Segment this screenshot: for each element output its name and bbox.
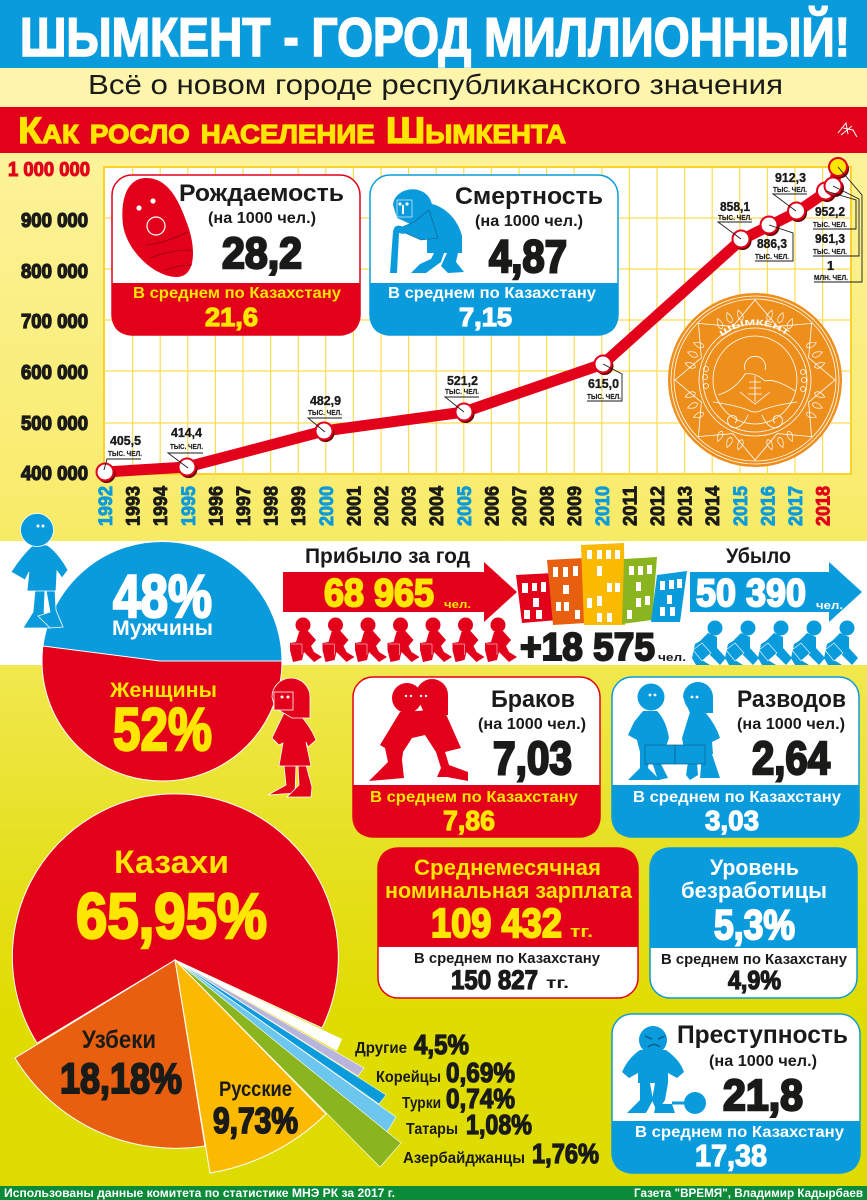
panel: crime rate xyxy=(612,1014,860,1173)
data callouts: 961,3 xyxy=(815,231,845,246)
x axis year labels: 1996 xyxy=(206,486,227,526)
panel: death rate: Смертность xyxy=(455,183,603,210)
legend: small ethnic groups: 1,08% xyxy=(466,1109,532,1140)
icon: colorful city buildings xyxy=(516,543,687,625)
x axis year labels: 2018 xyxy=(814,486,835,526)
section heading: population growth xyxy=(0,107,867,153)
panel: crime rate: 21,8 xyxy=(723,1071,803,1120)
panel: arrivals xyxy=(283,545,517,662)
data callouts: ТЫС. ЧЕЛ. xyxy=(813,220,847,229)
panel: marriages: 7,03 xyxy=(493,732,572,784)
icons: departing people xyxy=(692,620,858,665)
panel: death rate: В среднем по Казахстану xyxy=(388,285,596,302)
data callouts: 858,1 xyxy=(720,199,750,214)
chart: gender pie: Женщины xyxy=(109,679,217,702)
x axis year labels: 2015 xyxy=(731,486,752,526)
panel: average salary: 150 827 xyxy=(451,965,538,995)
footer: Использованы данные комитета по статистике МНЭ РК за 2017 г. xyxy=(4,1188,395,1200)
x axis year labels: 2001 xyxy=(344,486,365,526)
slice: Koreans xyxy=(175,960,364,1076)
panel: arrivals: Прибыло за год xyxy=(305,545,470,568)
icon: woman xyxy=(268,678,316,797)
x axis year labels: 2013 xyxy=(676,486,697,526)
panel: marriages: 7,86 xyxy=(443,805,495,836)
x axis year labels: 2008 xyxy=(538,486,559,526)
chart: ethnic composition pie xyxy=(12,794,401,1173)
panel: unemployment: 5,3% xyxy=(714,901,795,948)
panel: birth rate: 21,6 xyxy=(205,302,258,332)
panel: departures: 50 390 xyxy=(696,572,806,615)
x axis year labels: 2004 xyxy=(427,486,448,526)
panel: arrivals: 68 965 xyxy=(324,572,434,615)
population line xyxy=(105,168,838,472)
chart: ethnic composition pie: Казахи xyxy=(114,844,229,880)
legend: small ethnic groups: Турки xyxy=(402,1095,441,1112)
y axis labels: 600 000 xyxy=(21,362,88,384)
footer xyxy=(0,1186,867,1200)
plot grid xyxy=(104,167,851,474)
chart: gender pie xyxy=(42,541,282,781)
panel: average salary: Среднемесячная xyxy=(414,855,601,880)
panel: divorces: 2,64 xyxy=(752,732,830,784)
chart: population line xyxy=(8,157,862,526)
x axis year labels: 1998 xyxy=(262,486,283,526)
legend: small ethnic groups: 0,69% xyxy=(446,1057,515,1088)
x axis year labels: 2014 xyxy=(703,486,724,526)
data callouts: 912,3 xyxy=(775,170,806,185)
data callouts: ТЫС. ЧЕЛ. xyxy=(108,449,142,458)
slice: Uzbeks xyxy=(15,960,205,1148)
panel: marriages: В среднем по Казахстану xyxy=(370,789,578,806)
x axis year labels: 1992 xyxy=(96,486,117,526)
panel: birth rate: В среднем по Казахстану xyxy=(133,285,341,302)
y axis labels: 800 000 xyxy=(21,261,88,283)
slice: Azerbaijanis xyxy=(175,960,401,1167)
panel: death rate: 7,15 xyxy=(459,302,512,332)
panel: crime rate: 17,38 xyxy=(695,1138,767,1173)
x axis year labels: 2002 xyxy=(372,486,393,526)
chart: ethnic composition pie: Русские xyxy=(219,1078,292,1101)
net migration figure: чел. xyxy=(658,652,686,664)
data callouts: 482,9 xyxy=(310,393,341,408)
x axis year labels: 2010 xyxy=(593,486,614,526)
data callouts: 1 xyxy=(827,258,834,273)
panel: death rate xyxy=(370,175,618,335)
slice: Tatars xyxy=(175,960,396,1132)
net migration figure: +18 575 xyxy=(520,626,655,669)
x axis year labels: 1995 xyxy=(179,486,200,526)
icon: city emblem: ШЫМКЕНТ xyxy=(719,319,790,336)
data callouts: 521,2 xyxy=(447,373,478,388)
data callouts: 405,5 xyxy=(110,433,141,448)
y axis labels: 700 000 xyxy=(21,311,88,333)
panel: crime rate: Преступность xyxy=(677,1021,848,1049)
icon: artist signature xyxy=(838,123,857,137)
panel: birth rate: Рождаемость xyxy=(179,180,344,207)
x axis year labels: 1993 xyxy=(124,486,145,526)
data callouts: 414,4 xyxy=(171,425,203,440)
data callouts: 952,2 xyxy=(815,204,845,219)
x axis year labels: 1994 xyxy=(151,486,172,526)
section heading: population growth: Как росло население Шымкента xyxy=(18,110,566,151)
y axis labels: 500 000 xyxy=(21,413,88,435)
legend: small ethnic groups: Другие xyxy=(355,1040,407,1057)
panel: departures xyxy=(690,545,862,665)
panel: crime rate: (на 1000 чел.) xyxy=(709,1053,817,1070)
data callouts xyxy=(104,167,862,470)
data callouts: 615,0 xyxy=(588,376,619,391)
footer: Газета "ВРЕМЯ", Владимир Кадырбаев xyxy=(634,1188,863,1200)
data callouts: МЛН. ЧЕЛ. xyxy=(814,273,848,282)
legend: small ethnic groups: Татары xyxy=(406,1121,458,1138)
panel: unemployment: безработицы xyxy=(681,878,827,903)
panel: average salary: В среднем по Казахстану xyxy=(414,951,600,967)
icon: divorcing couple xyxy=(628,682,720,780)
x axis year labels xyxy=(96,486,835,526)
icon: swaddled baby xyxy=(122,178,193,277)
chart: gender pie: 52% xyxy=(113,696,212,763)
icon: city emblem xyxy=(668,293,842,467)
panel: marriages xyxy=(353,677,600,837)
panel: divorces: (на 1000 чел.) xyxy=(737,716,845,733)
legend: small ethnic groups: Корейцы xyxy=(376,1069,441,1086)
x axis year labels: 2005 xyxy=(455,486,476,526)
data callouts: ТЫС. ЧЕЛ. xyxy=(773,185,807,194)
slice: Kazakhs xyxy=(12,794,338,1043)
panel: average salary: тг. xyxy=(570,922,593,941)
data callouts: ТЫС. ЧЕЛ. xyxy=(755,252,789,261)
x axis year labels: 2009 xyxy=(565,486,586,526)
data callouts: ТЫС. ЧЕЛ. xyxy=(587,392,621,401)
data callouts: ТЫС. ЧЕЛ. xyxy=(718,213,752,222)
panel: arrivals: чел. xyxy=(444,599,471,611)
chart: gender pie: 48% xyxy=(113,563,212,630)
y axis labels xyxy=(8,159,90,485)
x axis year labels: 1997 xyxy=(234,486,255,526)
arrow: departures xyxy=(690,562,862,622)
data callouts: ТЫС. ЧЕЛ. xyxy=(813,247,847,256)
panel: marriages: Браков xyxy=(491,686,575,713)
chart: ethnic composition pie: 65,95% xyxy=(76,880,267,952)
panel: unemployment: Уровень xyxy=(710,855,799,880)
chart: ethnic composition pie: Узбеки xyxy=(82,1026,156,1054)
y axis labels: 400 000 xyxy=(21,463,88,485)
panel: crime rate: В среднем по Казахстану xyxy=(635,1124,844,1141)
panel: unemployment: 4,9% xyxy=(728,965,781,995)
panel: unemployment: В среднем по Казахстану xyxy=(661,952,847,968)
legend: small ethnic groups: Азербайджанцы xyxy=(403,1150,525,1167)
icon: convict with ball and chain xyxy=(622,1026,706,1114)
panel: birth rate: (на 1000 чел.) xyxy=(208,210,316,227)
data callouts: ТЫС. ЧЕЛ. xyxy=(308,408,342,417)
x axis year labels: 2007 xyxy=(510,486,531,526)
panel: divorces: Разводов xyxy=(737,686,846,713)
chart: ethnic composition pie: 9,73% xyxy=(213,1100,298,1141)
panel: divorces xyxy=(612,677,859,837)
x axis year labels: 2000 xyxy=(317,486,338,526)
panel: unemployment xyxy=(650,848,857,998)
panel: average salary: номинальная зарплата xyxy=(385,878,633,903)
panel: divorces: В среднем по Казахстану xyxy=(633,789,841,806)
panel: birth rate xyxy=(112,175,360,335)
x axis year labels: 1999 xyxy=(289,486,310,526)
x axis year labels: 2017 xyxy=(786,486,807,526)
panel: departures: чел. xyxy=(816,600,843,612)
icon: embracing couple xyxy=(369,679,468,781)
markers xyxy=(96,158,849,483)
legend: small ethnic groups xyxy=(355,1029,599,1169)
data callouts: ТЫС. ЧЕЛ. xyxy=(445,387,479,396)
x axis year labels: 2003 xyxy=(400,486,421,526)
chart: ethnic composition pie: 18,18% xyxy=(60,1055,182,1103)
icon: old woman with cane xyxy=(390,189,464,273)
y axis labels: 900 000 xyxy=(21,210,88,232)
x axis year labels: 2006 xyxy=(482,486,503,526)
icons: arriving people xyxy=(290,618,517,662)
panel: average salary: 109 432 xyxy=(431,900,562,946)
panel: death rate: (на 1000 чел.) xyxy=(475,213,583,230)
slice: Turks xyxy=(175,960,386,1104)
slice: others xyxy=(175,960,342,1051)
panel: departures: Убыло xyxy=(726,545,791,568)
panel: death rate: 4,87 xyxy=(489,231,567,282)
icon: man xyxy=(11,514,68,628)
y axis labels: 1 000 000 xyxy=(8,159,90,181)
data callouts: 886,3 xyxy=(757,236,787,251)
chart: gender pie: Мужчины xyxy=(112,617,213,640)
panel: divorces: 3,03 xyxy=(705,805,759,836)
data callouts: ТЫС. ЧЕЛ. xyxy=(170,442,203,451)
x axis year labels: 2016 xyxy=(758,486,779,526)
panel: average salary xyxy=(378,848,638,998)
panel: birth rate: 28,2 xyxy=(222,229,302,278)
legend: small ethnic groups: 1,76% xyxy=(532,1138,599,1169)
x axis year labels: 2011 xyxy=(620,486,641,526)
panel: migration band background xyxy=(0,541,867,665)
x axis year labels: 2012 xyxy=(648,486,669,526)
arrow: arrivals xyxy=(283,562,517,622)
subtitle xyxy=(0,68,867,107)
panel: marriages: (на 1000 чел.) xyxy=(478,716,586,733)
legend: small ethnic groups: 4,5% xyxy=(414,1029,469,1060)
slice: Russians xyxy=(175,960,326,1173)
subtitle: Всё о новом городе республиканского значения xyxy=(88,69,783,100)
panel: average salary: тг. xyxy=(546,975,569,992)
legend: small ethnic groups: 0,74% xyxy=(446,1083,515,1114)
